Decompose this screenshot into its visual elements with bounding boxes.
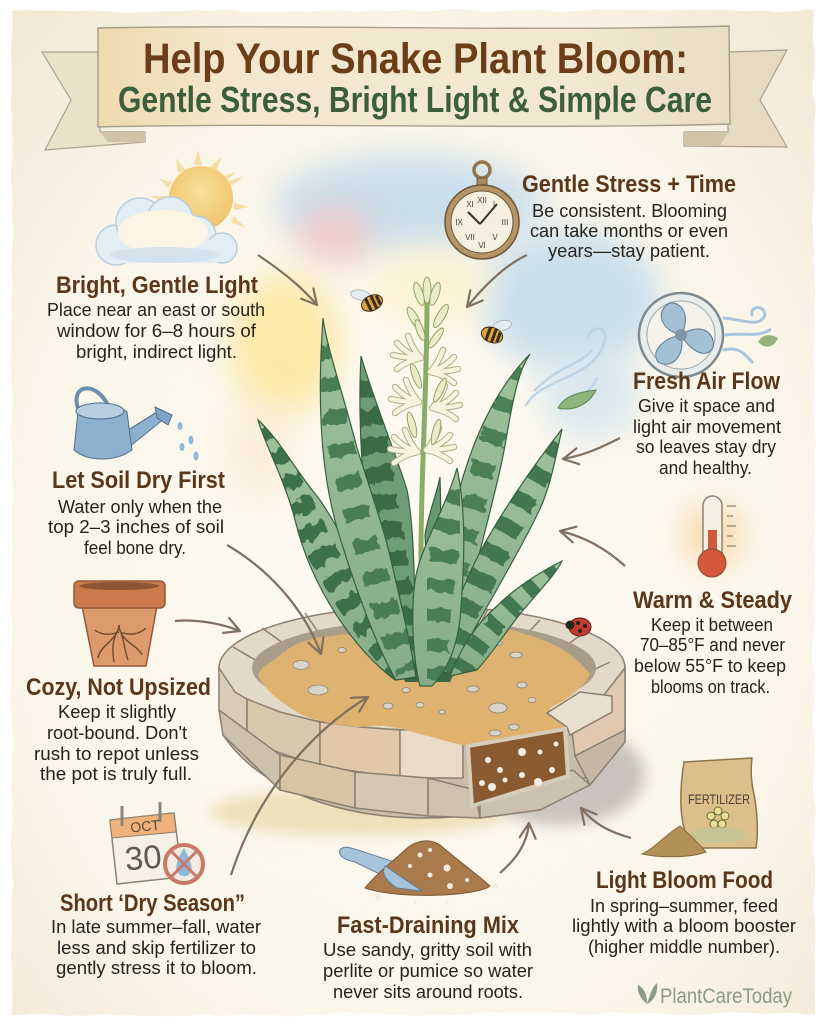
body text: Water only when the [58, 496, 222, 517]
icon: pocket watch [445, 162, 519, 259]
body text [633, 395, 781, 478]
icon: pocket watch: I [493, 200, 495, 209]
body text: the pot is truly full. [40, 763, 192, 784]
soil cross-section cutout [468, 729, 568, 806]
body text [51, 916, 261, 978]
panel: cozy not upsized [26, 581, 211, 784]
body text: can take months or even [530, 220, 728, 241]
body text: top 2–3 inches of soil [48, 516, 224, 537]
icon: pocket watch: XII [477, 196, 487, 205]
arrow: light to plant [258, 255, 317, 305]
banner ribbon [98, 26, 730, 127]
icon: calendar with no-water sign: OCT [130, 816, 161, 835]
body text: years—stay patient. [548, 240, 710, 261]
body text: below 55°F to keep [634, 655, 786, 676]
icon: pocket watch: XI [466, 200, 474, 209]
icon: fan [639, 293, 778, 377]
pebbles [293, 640, 536, 736]
heading: Gentle Stress + Time [522, 171, 736, 198]
body text: light air movement [633, 416, 781, 437]
body text: Keep it slightly [58, 701, 177, 722]
banner left tail [42, 52, 145, 150]
ring wall base [219, 668, 625, 818]
body text: so leaves stay dry [636, 436, 777, 457]
body text [530, 200, 728, 261]
logo: PlantCareToday: PlantCareToday [660, 985, 792, 1008]
subtitle: Gentle Stress, Bright Light & Simple Care [118, 79, 712, 120]
panel: gentle stress + time [445, 162, 736, 261]
heading: Fast-Draining Mix [337, 912, 520, 939]
body text: never sits around roots. [333, 981, 523, 1002]
arrow: water to soil [227, 545, 321, 654]
body text: In spring–summer, feed [590, 895, 778, 916]
icon: terracotta pot with roots [74, 581, 165, 666]
icon: thermometer [661, 483, 765, 587]
leaf back left [360, 356, 415, 675]
body text: Use sandy, gritty soil with [323, 939, 532, 960]
title banner [42, 26, 787, 150]
icon: calendar with no-water sign [110, 802, 203, 884]
panel: bright gentle light [47, 150, 265, 362]
inner wall shade [252, 620, 596, 716]
icon: fertilizer bag [642, 758, 757, 857]
heading: Cozy, Not Upsized [26, 674, 211, 701]
ring shadow [210, 725, 645, 836]
body text: rush to repot unless [34, 743, 199, 764]
body text: bright, indirect light. [76, 341, 237, 362]
icon: wind swirl and leaf left [526, 328, 605, 410]
arrow: mix to ring [500, 823, 529, 873]
leaf tall left [320, 318, 416, 680]
wall stones [219, 668, 625, 818]
arrow: air flow to plant [563, 438, 620, 459]
flower buds [405, 277, 451, 445]
body text [634, 614, 786, 697]
body text: (higher middle number). [588, 936, 780, 957]
heading: Short ‘Dry Season” [60, 890, 245, 917]
panel: short dry season [51, 802, 261, 978]
watercolor wash behind plant [225, 155, 660, 505]
body text [48, 496, 224, 558]
body text: blooms on track. [651, 676, 770, 697]
leaf front center [413, 468, 464, 686]
body text: lightly with a bloom booster [572, 915, 796, 936]
icon: fertilizer bag: FERTILIZER [688, 792, 750, 807]
icon: sun and cloud [96, 150, 249, 265]
leaf small center [425, 477, 441, 590]
icon: pocket watch: IX [455, 218, 463, 227]
body text: window for 6–8 hours of [56, 320, 257, 341]
panel: light bloom food [572, 758, 796, 957]
heading: Light Bloom Food [596, 867, 773, 894]
leaf base mass [385, 620, 480, 682]
body text: In late summer–fall, water [51, 916, 261, 937]
stone ring planter [219, 606, 625, 818]
body text: less and skip fertilizer to [57, 937, 256, 958]
snake plant [258, 277, 562, 686]
body text: feel bone dry. [84, 537, 186, 558]
body text: 70–85°F and never [640, 634, 785, 655]
icon: ladybug [566, 618, 591, 636]
leaf far left [258, 420, 412, 680]
body text: Be consistent. Blooming [532, 200, 727, 221]
icon: bee left [346, 279, 385, 317]
body text: and healthy. [659, 457, 752, 478]
icon: pocket watch: VII [465, 233, 475, 242]
leaf back right [460, 354, 530, 588]
stem [421, 300, 427, 590]
body text: root-bound. Don't [47, 722, 187, 743]
icon: watering can [74, 388, 198, 460]
heading: Fresh Air Flow [633, 368, 780, 395]
icon: pocket watch: V [492, 233, 498, 242]
back rim stones [233, 607, 610, 674]
body text: perlite or pumice so water [323, 960, 533, 981]
body text: Place near an east or south [47, 299, 265, 320]
panel: fast-draining mix [323, 841, 533, 1002]
icon: soil pile and scoop [340, 841, 498, 905]
arrow: food to ring [581, 808, 631, 838]
body text: Keep it between [651, 614, 773, 635]
title: Help Your Snake Plant Bloom: [143, 35, 688, 83]
body text: gently stress it to bloom. [56, 957, 257, 978]
icon: pocket watch: III [502, 218, 508, 227]
leaf low right [450, 561, 562, 676]
cut stone end [547, 692, 612, 735]
panel: let soil dry first [48, 388, 225, 558]
arrow: dry season to soil [231, 697, 368, 875]
panel: fresh air flow [526, 293, 781, 478]
heading: Bright, Gentle Light [56, 272, 258, 299]
icon: bee right [479, 311, 515, 348]
banner fold shadows [100, 132, 728, 146]
body text [34, 701, 199, 784]
blossoms [390, 336, 460, 463]
panel: warm and steady [633, 483, 793, 697]
arrow: warmth to plant [560, 531, 625, 566]
arrow: time to plant [467, 255, 527, 307]
body text: Give it space and [638, 395, 775, 416]
ring top rim [219, 606, 625, 730]
heading: Warm & Steady [633, 587, 793, 614]
sandy soil surface [258, 630, 590, 747]
body text [572, 895, 796, 957]
body text [47, 299, 265, 362]
leaf right [434, 429, 562, 674]
arrow: pot to ring [175, 620, 240, 631]
icon: calendar with no-water sign: 30 [123, 837, 163, 878]
flower spike [390, 277, 460, 590]
body text [323, 939, 533, 1002]
icon: pocket watch: VI [478, 241, 486, 250]
banner right tail [684, 50, 787, 147]
heading: Let Soil Dry First [52, 467, 225, 494]
